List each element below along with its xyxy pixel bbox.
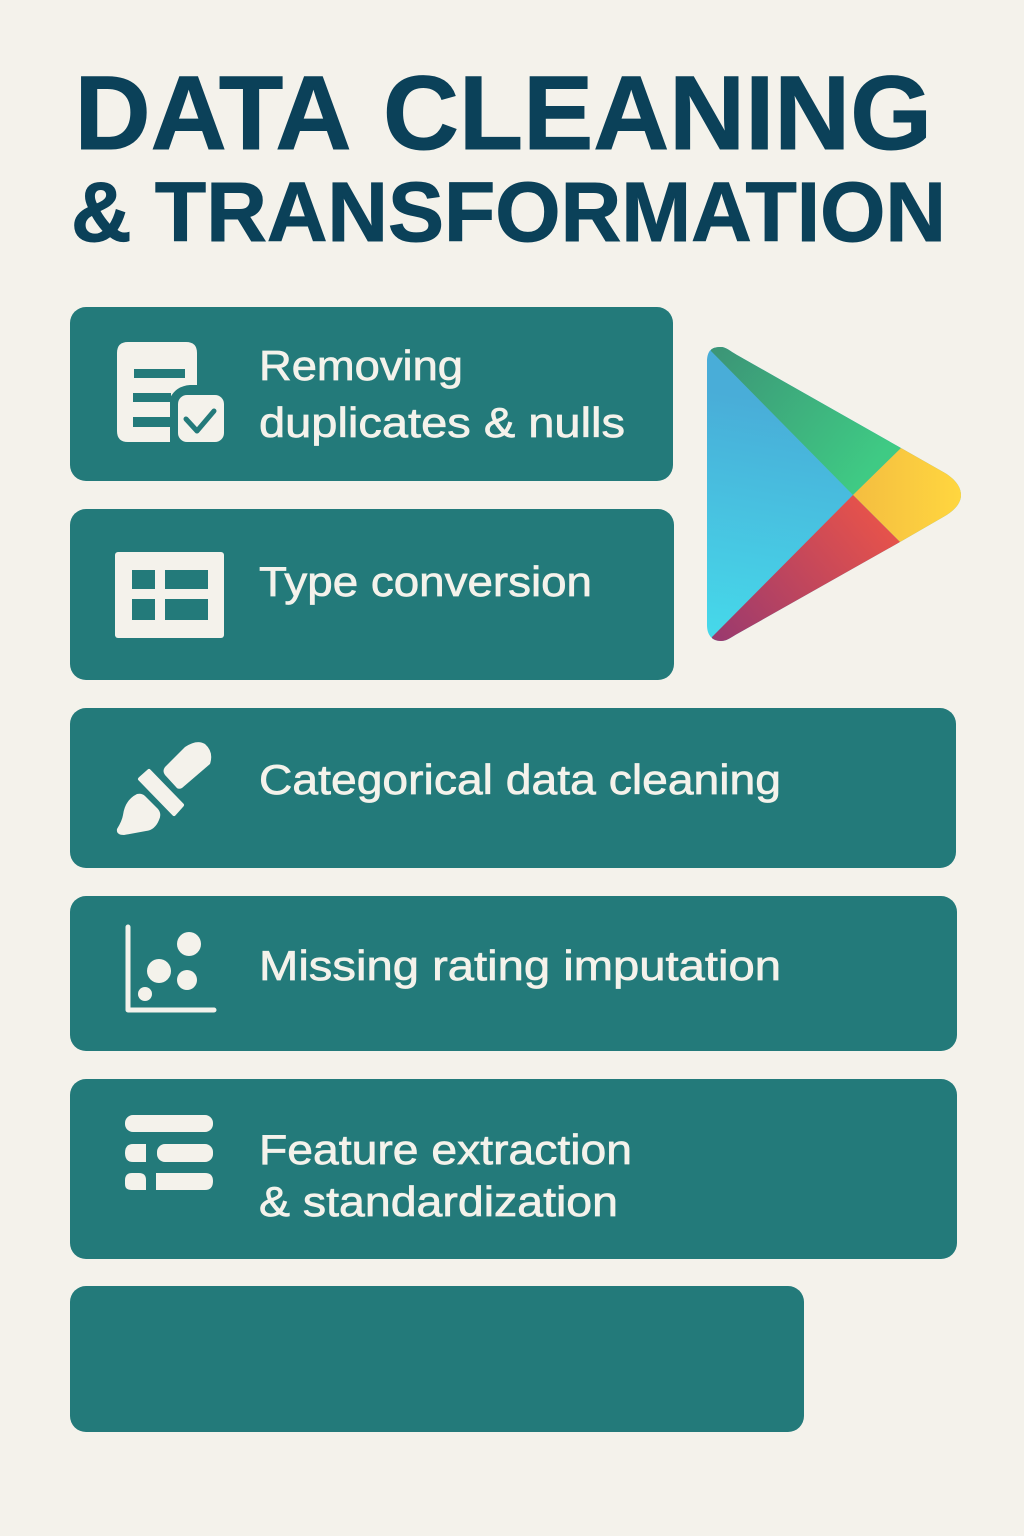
title: & TRANSFORMATION [71,165,946,259]
label: feature extraction and standardization: & standardization [259,1178,618,1225]
icon: brush [117,742,211,835]
title [71,55,946,259]
title: DATA [74,55,352,172]
label: missing rating imputation: Missing rating imputation [259,942,781,989]
title: CLEANING [383,55,932,172]
label: feature extraction and standardization [259,1126,632,1225]
panel: removing duplicates and nulls [70,307,673,481]
label: feature extraction and standardization: Feature extraction [259,1126,632,1173]
icon: document with check [117,342,224,442]
label: removing duplicates and nulls: Removing [259,342,463,389]
label: categorical data cleaning: Categorical data cleaning [259,756,781,803]
icon: table [115,552,224,638]
panel: categorical data cleaning [70,708,956,868]
icon: list [125,1115,213,1190]
panel: type conversion [70,509,674,680]
icon: scatter plot [128,927,214,1010]
label: removing duplicates and nulls [259,342,625,446]
panel: missing rating imputation [70,896,957,1051]
panel: feature extraction and standardization [70,1079,957,1259]
panel: empty bar [70,1286,804,1432]
label: removing duplicates and nulls: duplicates & nulls [259,399,625,446]
icon: play store logo [707,347,961,641]
label: type conversion: Type conversion [259,558,592,605]
